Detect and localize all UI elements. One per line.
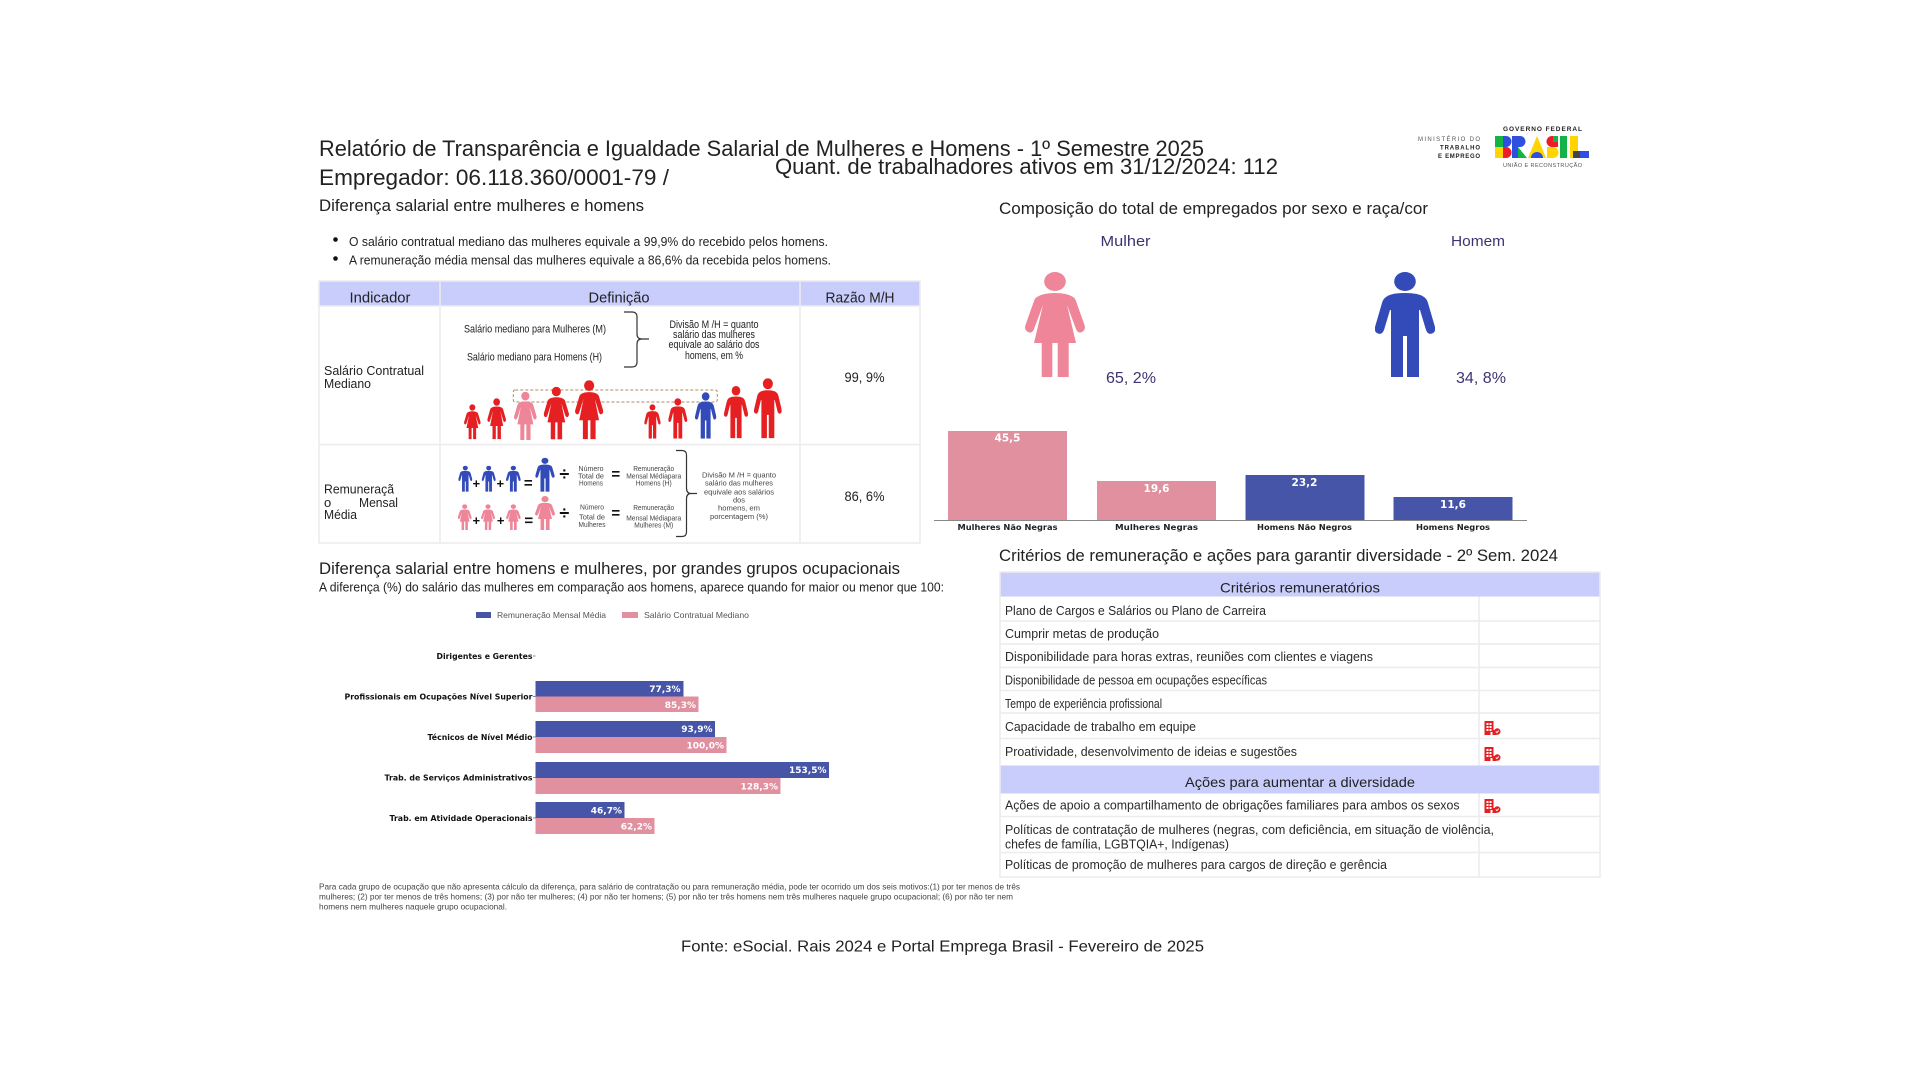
bar chart: sex and race bbox=[934, 431, 1527, 532]
formula: women: Mulheres (M) bbox=[634, 520, 674, 529]
employer id: Empregador: 06.118.360/0001-79 / bbox=[319, 165, 670, 190]
icon: man bbox=[1375, 272, 1435, 377]
table header bbox=[350, 290, 894, 306]
horizontal bar chart: 128,3% bbox=[740, 782, 778, 792]
action rows: Ações de apoio a compartilhamento de obrigações familiares para ambos os sexos bbox=[1005, 798, 1460, 812]
active workers count: Quant. de trabalhadores ativos em 31/12/2024: 112 bbox=[775, 154, 1278, 179]
panel: criteria and actions bbox=[999, 547, 1600, 877]
criteria table bbox=[1000, 572, 1600, 877]
horizontal bar chart: 85,3% bbox=[665, 701, 696, 711]
formula explanation: dos bbox=[733, 495, 745, 504]
bullet list bbox=[333, 235, 831, 268]
footnote: mulheres; (2) por ter menos de três homens; (3) por não ter mulheres; (4) por não ter homens; (5) por não ter três homens nem três mulheres naquele grupo ocupacional; (6) por não ter nem bbox=[319, 892, 1013, 902]
bar chart: sex and race: Homens Negros bbox=[1416, 523, 1490, 532]
formula: women: ÷ bbox=[559, 503, 569, 523]
row: mean monthly pay bbox=[324, 450, 884, 536]
horizontal bar chart bbox=[344, 652, 829, 834]
horizontal bar chart: Profissionais em Ocupações Nível Superior bbox=[344, 692, 533, 702]
footnote: homens nem mulheres naquele grupo ocupacional. bbox=[319, 902, 507, 912]
logo: government bbox=[1418, 126, 1589, 169]
criteria rows: Proatividade, desenvolvimento de ideias e sugestões bbox=[1005, 745, 1297, 759]
formula: women: + bbox=[497, 513, 505, 528]
legend: Salário Contratual Mediano bbox=[644, 610, 749, 620]
icon: building check 1 bbox=[1484, 721, 1500, 735]
horizontal bar chart: Trab. de Serviços Administrativos bbox=[384, 774, 533, 782]
criteria rows: Cumprir metas de produção bbox=[1005, 627, 1159, 641]
action rows: Políticas de promoção de mulheres para cargos de direção e gerência bbox=[1005, 858, 1387, 872]
criteria rows bbox=[1005, 604, 1373, 759]
formula explanation: Divisão M /H = quanto bbox=[702, 471, 776, 480]
bar chart: sex and race: 19,6 bbox=[1144, 483, 1169, 495]
label: woman: Mulher bbox=[1100, 233, 1150, 250]
icon: woman bbox=[1025, 272, 1085, 377]
horizontal bar chart: 77,3% bbox=[649, 685, 680, 695]
formula: men: Remuneração bbox=[633, 464, 674, 473]
logo: government: TRABALHO bbox=[1440, 146, 1480, 152]
horizontal bar chart: Técnicos de Nível Médio bbox=[428, 732, 533, 742]
section header: criteria: Critérios remuneratórios bbox=[1220, 580, 1380, 596]
row: contractual median salary: 99, 9% bbox=[844, 370, 884, 385]
panel: employee composition bbox=[934, 200, 1527, 532]
footnote bbox=[319, 882, 1020, 912]
percent women: 65, 2% bbox=[1106, 370, 1156, 387]
formula: men bbox=[458, 458, 682, 492]
bullet list: A remuneração média mensal das mulheres equivale a 86,6% da recebida pelos homens. bbox=[349, 254, 831, 268]
horizontal bar chart: Dirigentes e Gerentes bbox=[436, 652, 533, 661]
action rows bbox=[1005, 798, 1494, 872]
bar chart: sex and race: 11,6 bbox=[1440, 499, 1466, 511]
row: contractual median salary: Salário Contratual bbox=[324, 363, 424, 378]
footnote: Para cada grupo de ocupação que não apresenta cálculo da diferença, para salário de contratação ou para remuneração média, pode ter ocorrido um dos seis motivos:(1) por ter menos de três bbox=[319, 882, 1020, 892]
logo: government: MINISTÉRIO DO bbox=[1418, 136, 1480, 143]
icon: building check 2 bbox=[1484, 747, 1500, 761]
row: contractual median salary: homens, em % bbox=[685, 350, 743, 362]
bar chart: sex and race: Mulheres Não Negras bbox=[958, 523, 1058, 532]
logo: government: GOVERNO FEDERAL bbox=[1503, 126, 1582, 133]
formula: women: Total de bbox=[579, 513, 605, 522]
percent men: 34, 8% bbox=[1456, 370, 1506, 387]
criteria rows: Disponibilidade para horas extras, reuniões com clientes e viagens bbox=[1005, 650, 1373, 664]
row: contractual median salary: salário das mulheres bbox=[673, 329, 755, 341]
criteria rows: Plano de Cargos e Salários ou Plano de Carreira bbox=[1005, 604, 1266, 618]
formula explanation: homens, em bbox=[718, 503, 760, 512]
horizontal bar chart: 46,7% bbox=[591, 806, 622, 816]
formula: men: Homens bbox=[579, 478, 603, 487]
row: contractual median salary: Salário mediano para Mulheres (M) bbox=[464, 324, 606, 336]
formula: men: + bbox=[473, 476, 481, 491]
formula explanation: equivale aos salários bbox=[704, 487, 774, 496]
horizontal bar chart: 153,5% bbox=[789, 766, 826, 776]
bar chart: sex and race: 45,5 bbox=[995, 432, 1020, 444]
row: contractual median salary: Mediano bbox=[324, 376, 371, 391]
row: mean monthly pay: Remuneraçã bbox=[324, 482, 395, 496]
row: mean monthly pay: 86, 6% bbox=[844, 489, 884, 504]
row: contractual median salary: Salário mediano para Homens (H) bbox=[467, 352, 602, 364]
heading: occupational groups: Diferença salarial entre homens e mulheres, por grandes grupos ocupacionais bbox=[319, 560, 900, 578]
criteria rows: Capacidade de trabalho em equipe bbox=[1005, 720, 1196, 734]
table header: Indicador bbox=[350, 290, 411, 306]
table header: Razão M/H bbox=[826, 290, 894, 306]
label: man: Homem bbox=[1451, 233, 1505, 250]
criteria rows: Disponibilidade de pessoa em ocupações específicas bbox=[1005, 674, 1267, 688]
logo: government: UNIÃO E RECONSTRUÇÃO bbox=[1503, 162, 1583, 169]
table header: Definição bbox=[588, 290, 650, 306]
formula: men: = bbox=[524, 475, 533, 492]
logo: government: E EMPREGO bbox=[1438, 154, 1480, 160]
icon: men median row bbox=[644, 378, 782, 439]
row: mean monthly pay: Mensal bbox=[359, 495, 398, 510]
formula explanation bbox=[702, 471, 776, 521]
heading: composition: Composição do total de empregados por sexo e raça/cor bbox=[999, 200, 1429, 218]
formula: women: Número bbox=[580, 503, 604, 512]
icon: women median row bbox=[464, 380, 603, 440]
bullet list: O salário contratual mediano das mulheres equivale a 99,9% do recebido pelos homens. bbox=[349, 235, 828, 249]
legend bbox=[476, 610, 749, 620]
formula: men: Número bbox=[578, 464, 604, 473]
heading: criteria: Critérios de remuneração e ações para garantir diversidade - 2º Sem. 2024 bbox=[999, 547, 1558, 565]
horizontal bar chart: 100,0% bbox=[686, 742, 724, 752]
bar chart: sex and race: Mulheres Negras bbox=[1115, 523, 1198, 532]
formula: women bbox=[458, 496, 682, 530]
icon: building check 3 bbox=[1484, 799, 1500, 813]
bar chart: sex and race: Homens Não Negros bbox=[1257, 523, 1352, 532]
heading: salary difference: Diferença salarial entre mulheres e homens bbox=[319, 197, 644, 215]
row: contractual median salary: Divisão M /H = quanto bbox=[670, 319, 758, 331]
formula explanation: porcentagem (%) bbox=[710, 512, 768, 521]
action rows: Políticas de contratação de mulheres (negras, com deficiência, em situação de violência, bbox=[1005, 823, 1494, 837]
indicators table bbox=[319, 281, 920, 543]
horizontal bar chart: 93,9% bbox=[681, 725, 712, 735]
formula explanation: salário das mulheres bbox=[705, 479, 773, 488]
formula: men: ÷ bbox=[559, 464, 569, 484]
formula: women: = bbox=[611, 505, 620, 522]
section header: actions: Ações para aumentar a diversidade bbox=[1185, 774, 1415, 790]
formula: women: = bbox=[524, 512, 533, 530]
row: contractual median salary: equivale ao salário dos bbox=[668, 339, 760, 351]
panel: occupational groups bbox=[319, 560, 1020, 912]
legend: Remuneração Mensal Média bbox=[497, 610, 606, 620]
formula: men: Mensal Médiapara bbox=[626, 471, 682, 480]
bar chart: sex and race: 23,2 bbox=[1292, 477, 1317, 489]
formula: women: Mulheres bbox=[578, 520, 606, 529]
formula: men: + bbox=[497, 476, 505, 491]
action rows: chefes de família, LGBTQIA+, Indígenas) bbox=[1005, 838, 1229, 852]
row: mean monthly pay: Média bbox=[324, 507, 358, 522]
formula: men: Total de bbox=[578, 471, 604, 480]
row: mean monthly pay: o bbox=[324, 495, 331, 510]
source note: Fonte: eSocial. Rais 2024 e Portal Emprega Brasil - Fevereiro de 2025 bbox=[681, 938, 1204, 956]
horizontal bar chart: Trab. em Atividade Operacionais bbox=[390, 814, 533, 823]
title: Relatório de Transparência e Igualdade Salarial de Mulheres e Homens - 1º Semestre 2025 bbox=[319, 136, 1204, 161]
horizontal bar chart: 62,2% bbox=[621, 822, 652, 832]
formula: women: Mensal Médiapara bbox=[626, 513, 682, 522]
subheading: A diferença (%) do salário das mulheres em comparação aos homens, aparece quando for maior ou menor que 100: bbox=[319, 580, 944, 594]
formula: women: Remuneração bbox=[633, 503, 674, 512]
criteria rows: Tempo de experiência profissional bbox=[1005, 697, 1162, 711]
formula: men: = bbox=[611, 466, 620, 483]
formula: women: + bbox=[473, 513, 481, 528]
panel: salary difference bbox=[319, 197, 920, 543]
row: contractual median salary bbox=[324, 312, 884, 440]
formula: men: Homens (H) bbox=[636, 478, 672, 487]
